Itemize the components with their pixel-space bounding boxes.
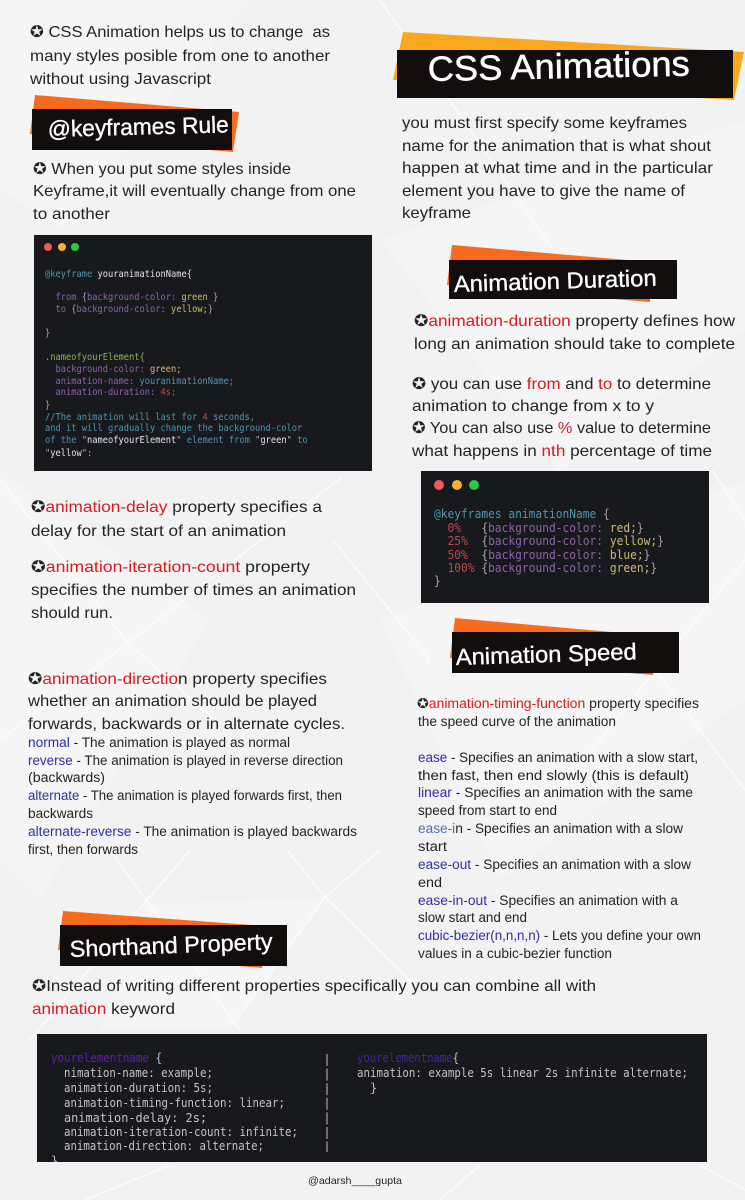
text: animation-direction bbox=[27, 671, 357, 857]
text: animation-timing-function: end bbox=[418, 875, 442, 890]
text: from, to and percent: what happens in nth percentage of time bbox=[411, 443, 712, 460]
text: animation-direction: alternate-reverse - The animation is played backwards bbox=[28, 824, 357, 839]
heading: Shorthand Property: Shorthand Property bbox=[69, 928, 274, 962]
text: animation-timing-function: slow start and end bbox=[418, 910, 527, 925]
text: animation-direction: backwards bbox=[28, 806, 93, 821]
code block: keyframe example: //The animation will last for 4 seconds, bbox=[45, 412, 255, 423]
text: animation-timing-function: ease-out - Specifies an animation with a slow bbox=[418, 857, 691, 872]
intro paragraph: keyframes name: you must first specify some keyframes bbox=[402, 115, 687, 132]
heading: Animation Speed: Animation Speed bbox=[455, 638, 637, 670]
text: animation-direction: first, then forwards bbox=[28, 842, 138, 857]
code block: longhand versus shorthand: yourelementname { bbox=[51, 1051, 162, 1065]
code block: longhand versus shorthand: animation-direction: alternate; bbox=[64, 1139, 264, 1153]
intro text: ✪ CSS Animation helps us to change as bbox=[30, 24, 330, 41]
text: animation-timing-function bbox=[417, 696, 701, 961]
code block: keyframe example: "yellow": bbox=[45, 448, 92, 459]
code block: longhand versus shorthand: animation-timing-function: linear; bbox=[64, 1096, 285, 1110]
code block: percentage keyframes: 0% {background-color: red;} bbox=[434, 520, 644, 535]
intro text: many styles posible from one to another bbox=[30, 48, 331, 65]
text: animation-timing-function: start bbox=[418, 839, 447, 854]
code block: longhand versus shorthand: nimation-name: example; bbox=[64, 1066, 213, 1080]
code block: percentage keyframes: 25% {background-color: yellow;} bbox=[434, 533, 664, 548]
text: animation-delay: delay for the start of an animation bbox=[31, 523, 286, 540]
text: animation-duration: ✪animation-duration property defines how bbox=[414, 313, 735, 330]
code block: keyframe example: of the "nameofyourElement" element from "green" to bbox=[45, 435, 308, 446]
heading: Animation Duration: Animation Duration bbox=[453, 265, 657, 297]
intro paragraph: keyframes name bbox=[402, 115, 714, 222]
code block: longhand versus shorthand: animation-duration: 5s; bbox=[64, 1081, 213, 1095]
code block: keyframe example: from {background-color: green } bbox=[45, 292, 218, 303]
text: animation-direction: whether an animation should be played bbox=[27, 693, 317, 710]
code block: longhand versus shorthand: yourelementname{ bbox=[357, 1051, 459, 1065]
code block: longhand versus shorthand: } bbox=[51, 1154, 58, 1168]
text: animation-timing-function: then fast, then end slowly (this is default) bbox=[418, 768, 689, 783]
heading: Shorthand Property bbox=[58, 911, 287, 968]
text: animation-timing-function: ease-in - Specifies an animation with a slow bbox=[418, 821, 683, 836]
text: animation-iteration-count: should run. bbox=[31, 605, 113, 622]
text: animation-timing-function: values in a cubic-bezier function bbox=[418, 946, 612, 961]
heading: @keyframes Rule: @keyframes Rule bbox=[47, 111, 229, 142]
text: animation-iteration-count: ✪animation-iteration-count property bbox=[31, 559, 310, 576]
code block: percentage keyframes: 50% {background-color: blue;} bbox=[434, 547, 650, 562]
code block: keyframe example: and it will gradually change the background-color bbox=[45, 423, 303, 434]
text: shorthand explanation: animation keyword bbox=[32, 1001, 175, 1018]
text: keyframe explanation: Keyframe,it will eventually change from one bbox=[33, 183, 356, 200]
heading: Animation Duration bbox=[447, 245, 677, 302]
text: keyframe explanation: ✪ When you put some styles inside bbox=[33, 161, 291, 178]
code block: longhand versus shorthand: animation-delay: 2s; bbox=[64, 1111, 207, 1125]
text: from, to and percent: ✪ You can also use % value to determine bbox=[412, 420, 711, 437]
intro paragraph: keyframes name: happen at what time and in the particular bbox=[402, 160, 714, 177]
text: shorthand explanation: ✪Instead of writing different properties specifically you can combine all with bbox=[32, 978, 596, 995]
text: animation-iteration-count: specifies the number of times an animation bbox=[31, 582, 356, 599]
text: animation-duration: long an animation should take to complete bbox=[414, 336, 735, 353]
heading: @keyframes Rule bbox=[30, 95, 239, 152]
text: animation-timing-function: linear - Specifies an animation with the same bbox=[418, 785, 693, 800]
text: animation-duration bbox=[414, 313, 735, 353]
text: animation-timing-function: ease-in-out - Specifies an animation with a bbox=[418, 893, 678, 908]
title: CSS Animations: CSS Animations bbox=[427, 45, 690, 89]
text: animation-timing-function: ease - Specifies an animation with a slow start, bbox=[418, 750, 698, 765]
code block: percentage keyframes: } bbox=[434, 573, 441, 588]
code block: keyframe example: } bbox=[45, 400, 50, 411]
intro text: without using Javascript bbox=[29, 71, 212, 88]
code block: keyframe example: } bbox=[45, 328, 50, 339]
text: animation-timing-function: the speed curve of the animation bbox=[418, 714, 616, 729]
code block: longhand versus shorthand bbox=[37, 1034, 707, 1168]
intro paragraph: keyframes name: keyframe bbox=[402, 205, 471, 222]
code block: longhand versus shorthand: } bbox=[370, 1081, 377, 1095]
code block: keyframe example: background-color: green; bbox=[45, 364, 182, 375]
text: animation-iteration-count bbox=[31, 559, 356, 622]
code block: percentage keyframes: @keyframes animationName { bbox=[434, 506, 610, 521]
text: animation-timing-function: ✪animation-timing-function property specifies bbox=[417, 696, 699, 711]
text: shorthand explanation bbox=[32, 978, 596, 1018]
code block: keyframe example bbox=[34, 235, 372, 471]
intro paragraph: keyframes name: name for the animation that is what shout bbox=[402, 138, 712, 155]
heading: Animation Speed bbox=[450, 618, 679, 675]
code block: percentage keyframes: 100% {background-color: green;} bbox=[434, 560, 657, 575]
code block: longhand versus shorthand: animation-iteration-count: infinite; bbox=[64, 1125, 298, 1139]
text: from, to and percent: animation to change from x to y bbox=[412, 398, 654, 415]
footer handle: @adarsh____gupta bbox=[308, 1175, 402, 1187]
text: from, to and percent bbox=[411, 376, 712, 460]
text: animation-direction: normal - The animation is played as normal bbox=[28, 735, 290, 750]
text: animation-direction: reverse - The animation is played in reverse direction bbox=[28, 753, 343, 768]
code block: keyframe example: animation-name: youranimationName; bbox=[45, 376, 234, 387]
intro paragraph: keyframes name: element you have to give the name of bbox=[402, 183, 686, 200]
text: keyframe explanation bbox=[33, 161, 356, 223]
title: CSS Animations bbox=[393, 32, 744, 100]
text: animation-timing-function: speed from start to end bbox=[418, 803, 557, 818]
code block: keyframe example: .nameofyourElement{ bbox=[45, 352, 145, 363]
code block: longhand versus shorthand: animation: example 5s linear 2s infinite alternate; bbox=[357, 1066, 688, 1080]
code block: percentage keyframes bbox=[421, 471, 709, 603]
intro text bbox=[29, 24, 331, 88]
text: animation-direction: alternate - The animation is played forwards first, then bbox=[28, 788, 342, 803]
text: animation-direction: forwards, backwards or in alternate cycles. bbox=[28, 716, 345, 733]
text: from, to and percent: ✪ you can use from and to to determine bbox=[412, 376, 711, 393]
text: animation-delay: ✪animation-delay property specifies a bbox=[31, 499, 322, 516]
text: keyframe explanation: to another bbox=[33, 206, 111, 223]
code block: keyframe example: @keyframe youranimationName{ bbox=[45, 269, 192, 280]
text: animation-timing-function: cubic-bezier(n,n,n,n) - Lets you define your own bbox=[418, 928, 701, 943]
code block: keyframe example: animation-duration: 4s; bbox=[45, 387, 176, 398]
code block: keyframe example: to {background-color: yellow;} bbox=[45, 304, 213, 315]
text: animation-delay bbox=[31, 499, 322, 540]
text: animation-direction: ✪animation-directio n property specifies bbox=[28, 671, 327, 688]
text: animation-direction: (backwards) bbox=[28, 770, 105, 785]
